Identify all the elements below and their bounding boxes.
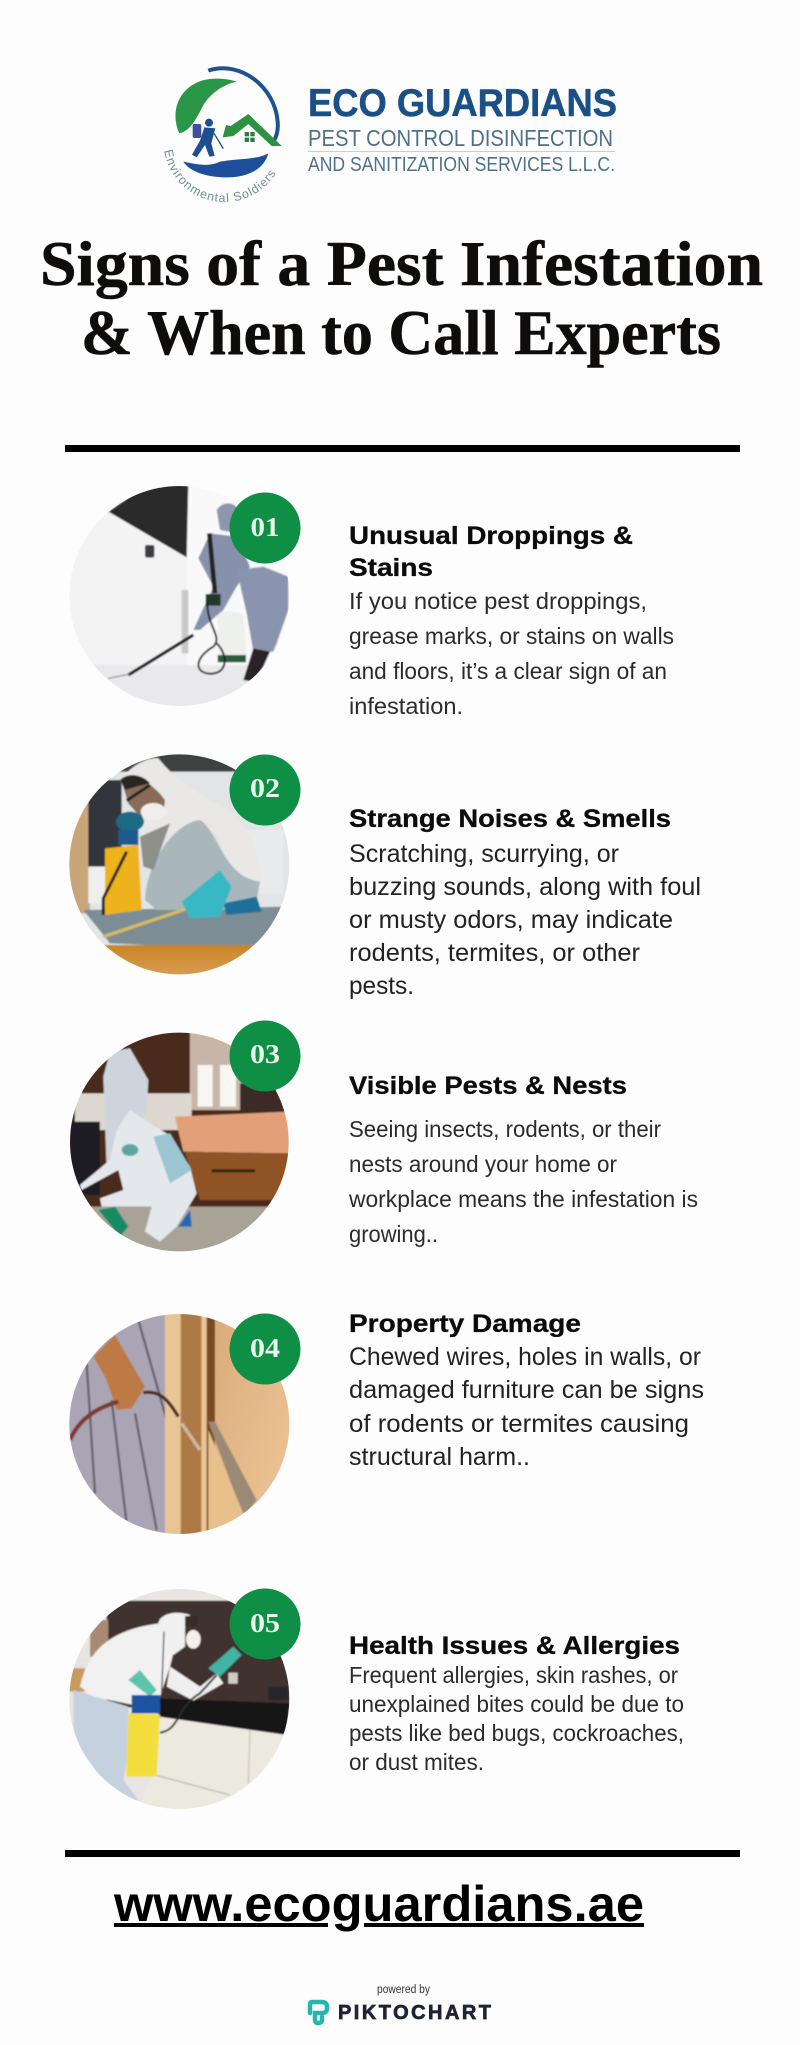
panel: sign 04 (63, 1310, 704, 1537)
body text: rodents, termites, or other (349, 939, 640, 967)
text: Piktochart wordmark: PIKTOCHART (338, 2002, 491, 2024)
text: Environmental Soldiers: Environmental Soldiers (164, 150, 276, 202)
text: powered by: powered by (377, 1984, 430, 1996)
website link: www.ecoguardians.ae (113, 1876, 644, 1932)
body text: and floors, it’s a clear sign of an (349, 658, 667, 684)
body text: infestation. (349, 693, 463, 719)
body text: damaged furniture can be signs (349, 1376, 704, 1404)
icon: Piktochart logo (310, 2002, 327, 2023)
badge 03: 03 (250, 1039, 280, 1069)
logo: Eco Guardians (164, 66, 617, 202)
badge 05 (230, 1588, 300, 1660)
panel: sign 01 (63, 480, 674, 719)
panel: sign 02 (63, 750, 701, 1000)
footer: powered by Piktochart (310, 1984, 491, 2024)
body text: grease marks, or stains on walls (349, 623, 674, 649)
body text: Frequent allergies, skin rashes, or (349, 1662, 678, 1688)
badge 05: 05 (250, 1608, 280, 1638)
body text: pests. (349, 972, 414, 1000)
body text: buzzing sounds, along with foul (349, 873, 701, 901)
body text: or dust mites. (349, 1749, 484, 1775)
badge 03 (230, 1020, 300, 1092)
photo: technician with yellow sprayer (69, 754, 290, 974)
logo wordmark line 2: PEST CONTROL DISINFECTION (308, 125, 613, 151)
body text: If you notice pest droppings, (349, 588, 647, 614)
body text: or musty odors, may indicate (349, 906, 673, 934)
body text (349, 1343, 704, 1471)
photo: technician spraying kitchen cabinet (70, 486, 290, 706)
top divider (65, 445, 740, 452)
body text (348, 1116, 698, 1247)
body text: Chewed wires, holes in walls, or (349, 1343, 701, 1371)
icon: logo emblem (164, 66, 282, 202)
body text: of rodents or termites causing (349, 1410, 689, 1438)
photo: spraying wooden framing (63, 1310, 295, 1537)
title: Signs of a Pest Infestation (40, 228, 763, 299)
heading: Property Damage (349, 1310, 581, 1338)
panel: sign 03 (63, 1020, 698, 1260)
logo wordmark line 3: AND SANITIZATION SERVICES L.L.C. (308, 154, 615, 176)
body text (349, 588, 674, 719)
photo: two technicians by wooden chest (70, 1032, 289, 1252)
heading (349, 522, 633, 582)
heading: Strange Noises & Smells (349, 805, 671, 833)
badge 01 (230, 492, 300, 564)
title (40, 228, 763, 368)
heading: Health Issues & Allergies (349, 1632, 680, 1660)
badge 04: 04 (250, 1333, 280, 1363)
body text: structural harm.. (349, 1443, 530, 1471)
body text: pests like bed bugs, cockroaches, (349, 1720, 684, 1746)
logo wordmark line 1: ECO GUARDIANS (308, 82, 617, 125)
heading: Visible Pests & Nests (349, 1072, 627, 1100)
badge 04 (230, 1314, 300, 1384)
body text: Seeing insects, rodents, or their (349, 1116, 661, 1142)
body text: Scratching, scurrying, or (349, 840, 619, 868)
heading: Stains (349, 554, 433, 582)
body text: workplace means the infestation is (348, 1186, 698, 1212)
photo: technician spraying kitchen wall (67, 1587, 293, 1813)
body text: nests around your home or (349, 1151, 617, 1177)
badge 02: 02 (250, 773, 280, 803)
heading: Unusual Droppings & (349, 522, 633, 550)
badge 01: 01 (250, 512, 280, 542)
body text: growing.. (349, 1221, 438, 1247)
title: & When to Call Experts (81, 297, 721, 368)
panel: sign 05 (67, 1587, 684, 1813)
badge 02 (230, 754, 300, 826)
body text (349, 1662, 684, 1775)
body text (349, 840, 701, 1000)
body text: unexplained bites could be due to (349, 1691, 684, 1717)
bottom divider (65, 1850, 740, 1857)
